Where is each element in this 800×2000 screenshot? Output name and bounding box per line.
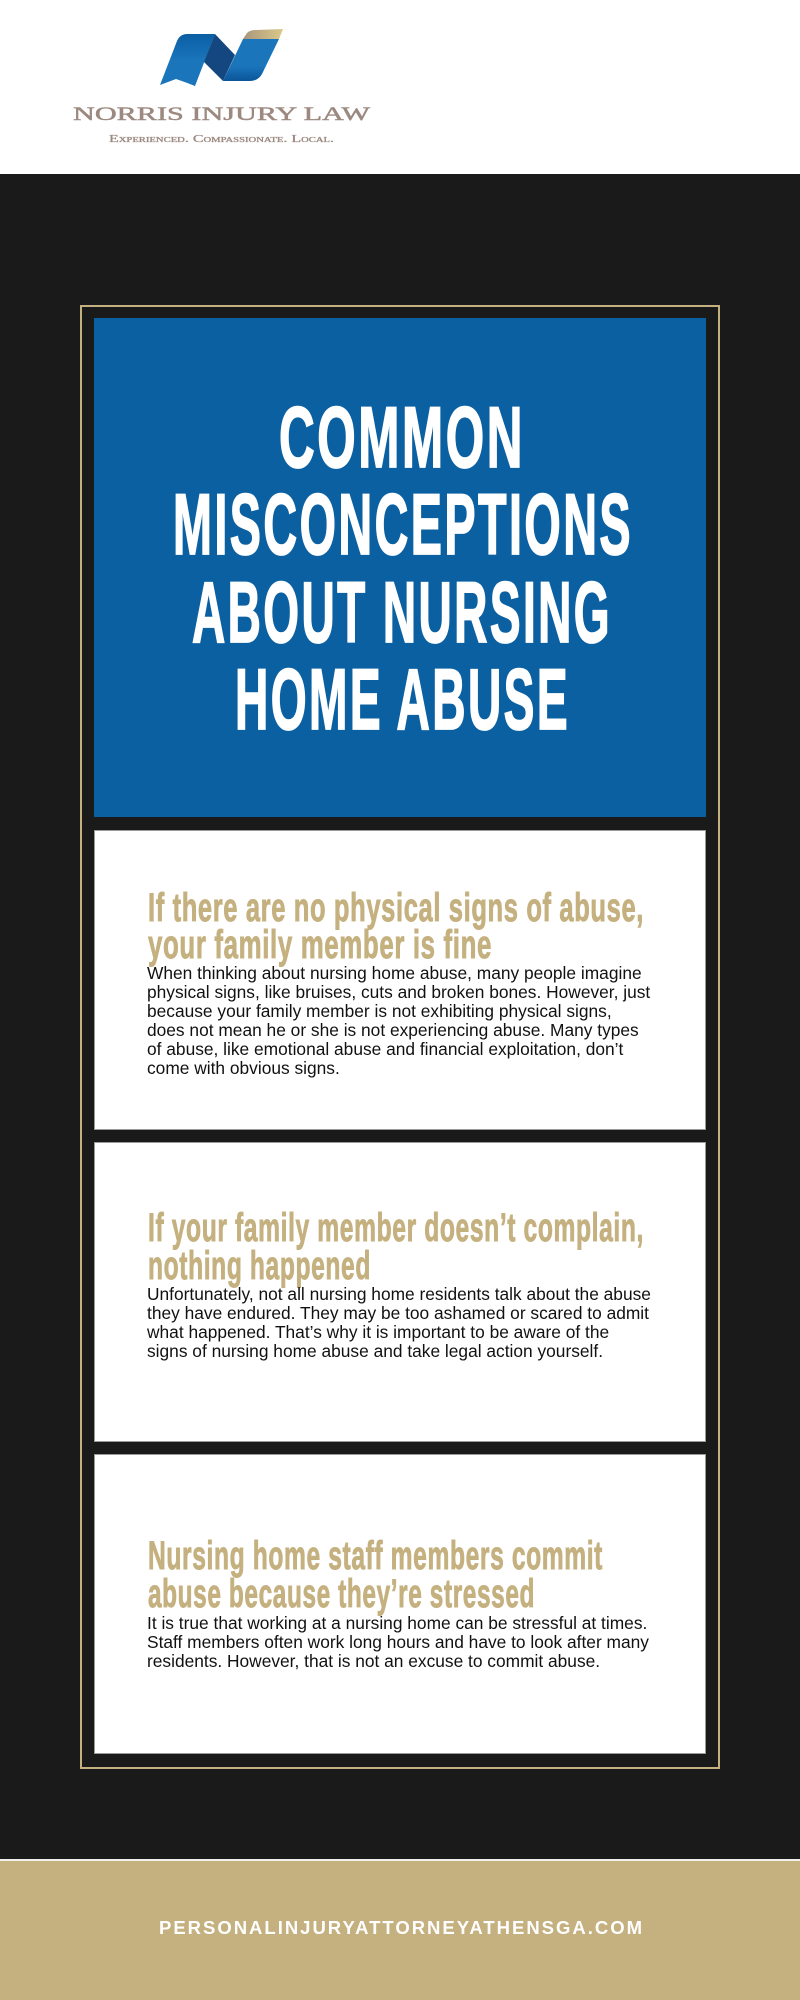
body text: physical signs, like bruises, cuts and broken bones. However, just (147, 982, 650, 1002)
panel: no physical signs (94, 830, 706, 1130)
heading (148, 886, 644, 967)
body text: residents. However, that is not an excuse to commit abuse. (147, 1651, 600, 1671)
title: COMMON (279, 390, 525, 486)
body text: they have endured. They may be too ashamed or scared to admit (147, 1303, 649, 1323)
header band with logo (0, 0, 800, 174)
body text: Staff members often work long hours and have to look after many (147, 1632, 649, 1652)
body text (146, 1284, 651, 1361)
heading (148, 1534, 603, 1616)
body text: When thinking about nursing home abuse, many people imagine (147, 963, 642, 983)
icon: Norris N ribbon logo (160, 29, 283, 86)
panel: staff stressed (94, 1454, 706, 1754)
footer band (0, 1859, 800, 2000)
panel: doesn't complain (94, 1142, 706, 1442)
body text: come with obvious signs. (147, 1058, 340, 1078)
body text (147, 963, 650, 1078)
heading: your family member is fine (148, 923, 492, 967)
body text: does not mean he or she is not experiencing abuse. Many types (147, 1020, 639, 1040)
body text: of abuse, like emotional abuse and financial exploitation, don’t (147, 1039, 623, 1059)
title (173, 390, 633, 748)
logo wordmark: NORRIS INJURY LAW (73, 104, 370, 125)
heading: nothing happened (148, 1244, 371, 1288)
heading (148, 1206, 644, 1288)
gold frame (81, 306, 719, 1768)
body text: because your family member is not exhibiting physical signs, (147, 1001, 612, 1021)
body text (147, 1613, 649, 1671)
logo tagline: Experienced. Compassionate. Local. (109, 134, 334, 145)
panel: title (94, 318, 706, 817)
footer website: PERSONALINJURYATTORNEYATHENSGA.COM (159, 1917, 642, 1938)
body text: It is true that working at a nursing home can be stressful at times. (147, 1613, 647, 1633)
heading: abuse because they’re stressed (148, 1572, 535, 1616)
body text: signs of nursing home abuse and take legal action yourself. (147, 1341, 603, 1361)
body text: what happened. That’s why it is important to be aware of the (146, 1322, 609, 1342)
body text: Unfortunately, not all nursing home residents talk about the abuse (147, 1284, 651, 1304)
